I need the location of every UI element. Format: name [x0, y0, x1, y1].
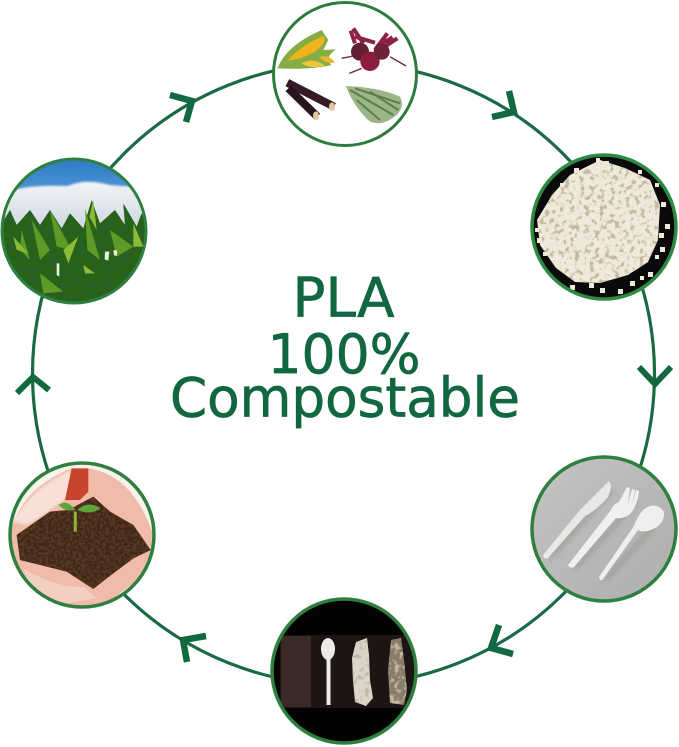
icon: corn — [277, 30, 336, 69]
soil circle border — [10, 463, 154, 607]
panel: soil in hands — [12, 464, 152, 606]
center title: PLA — [292, 266, 395, 330]
arrow: to pellets — [492, 91, 514, 117]
plants circle border — [2, 159, 146, 303]
pellet pile — [535, 158, 670, 294]
arrow: to compost — [491, 625, 513, 654]
stage: mostly degraded — [388, 638, 407, 705]
shadows — [550, 490, 655, 580]
white highlights — [57, 250, 117, 277]
panel: PLA cutlery — [534, 458, 674, 600]
panel: composting stages — [274, 600, 414, 742]
icon: fork — [568, 487, 639, 568]
soil — [17, 497, 151, 589]
stage strip: first panel — [281, 636, 311, 707]
bright blades — [20, 208, 133, 293]
icon: spoon stage — [321, 638, 335, 705]
clouds — [4, 180, 143, 228]
compost circle border — [272, 599, 416, 743]
center title: Compostable — [170, 366, 520, 430]
top circle border — [274, 2, 416, 146]
panel: raw materials — [275, 27, 415, 124]
cutlery circle border — [532, 457, 676, 601]
arrow: to plants — [17, 377, 49, 393]
icon: wheatgrass — [346, 86, 402, 123]
arrow: to top circle — [170, 95, 192, 122]
center title — [170, 266, 520, 430]
arrow: to soil — [183, 636, 206, 662]
hands — [10, 468, 153, 608]
icon: seedling — [74, 512, 77, 532]
icon: spoon — [599, 505, 664, 580]
panel: corn field — [4, 160, 144, 302]
cycle ring — [32, 63, 654, 685]
center title: 100% — [268, 323, 420, 386]
stage: partially degraded — [352, 638, 373, 706]
pellets circle border — [532, 155, 676, 299]
sky — [16, 160, 130, 191]
icon: knife — [543, 481, 611, 559]
panel: PLA pellets — [534, 156, 674, 298]
icon: beets — [342, 28, 406, 73]
corn leaves — [4, 200, 144, 302]
icon: sugarcane — [287, 83, 335, 120]
arrow: to cutlery — [639, 367, 671, 384]
